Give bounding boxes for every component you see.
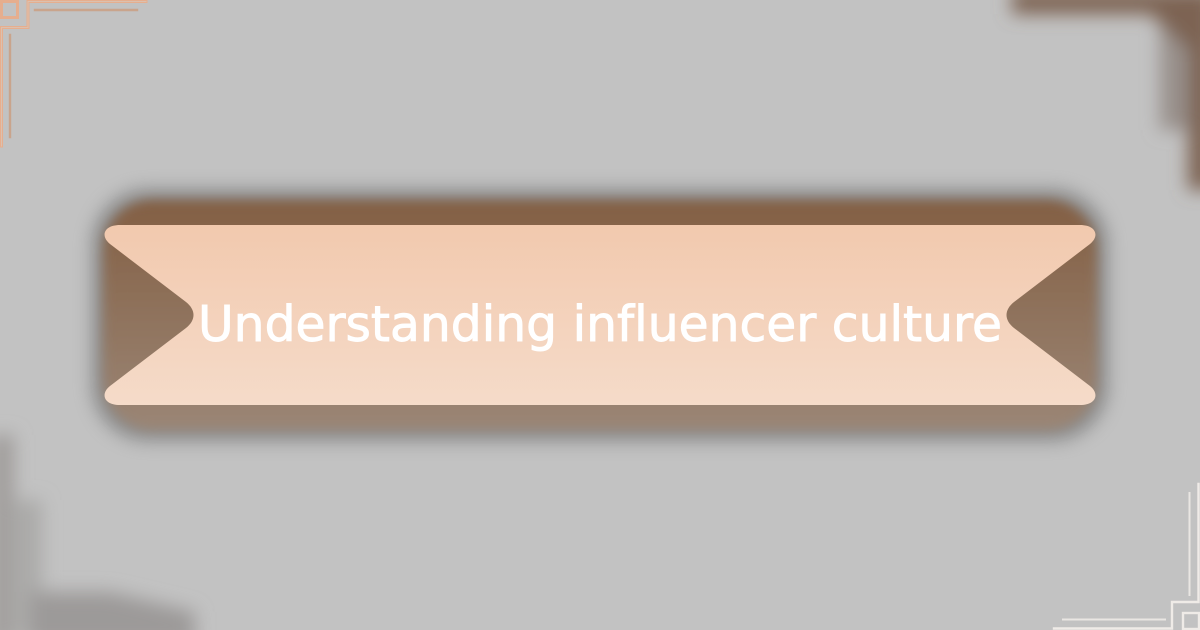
corner ornament: bottom right [1054, 484, 1199, 629]
blurred corner shadow: top right [1012, 0, 1200, 190]
ribbon shadow [92, 189, 1108, 441]
title: Understanding influencer culture [198, 296, 1002, 353]
blurred corner shadow: bottom left [0, 435, 195, 630]
ribbon banner [105, 225, 1095, 405]
corner ornament: top left [2, 2, 146, 146]
